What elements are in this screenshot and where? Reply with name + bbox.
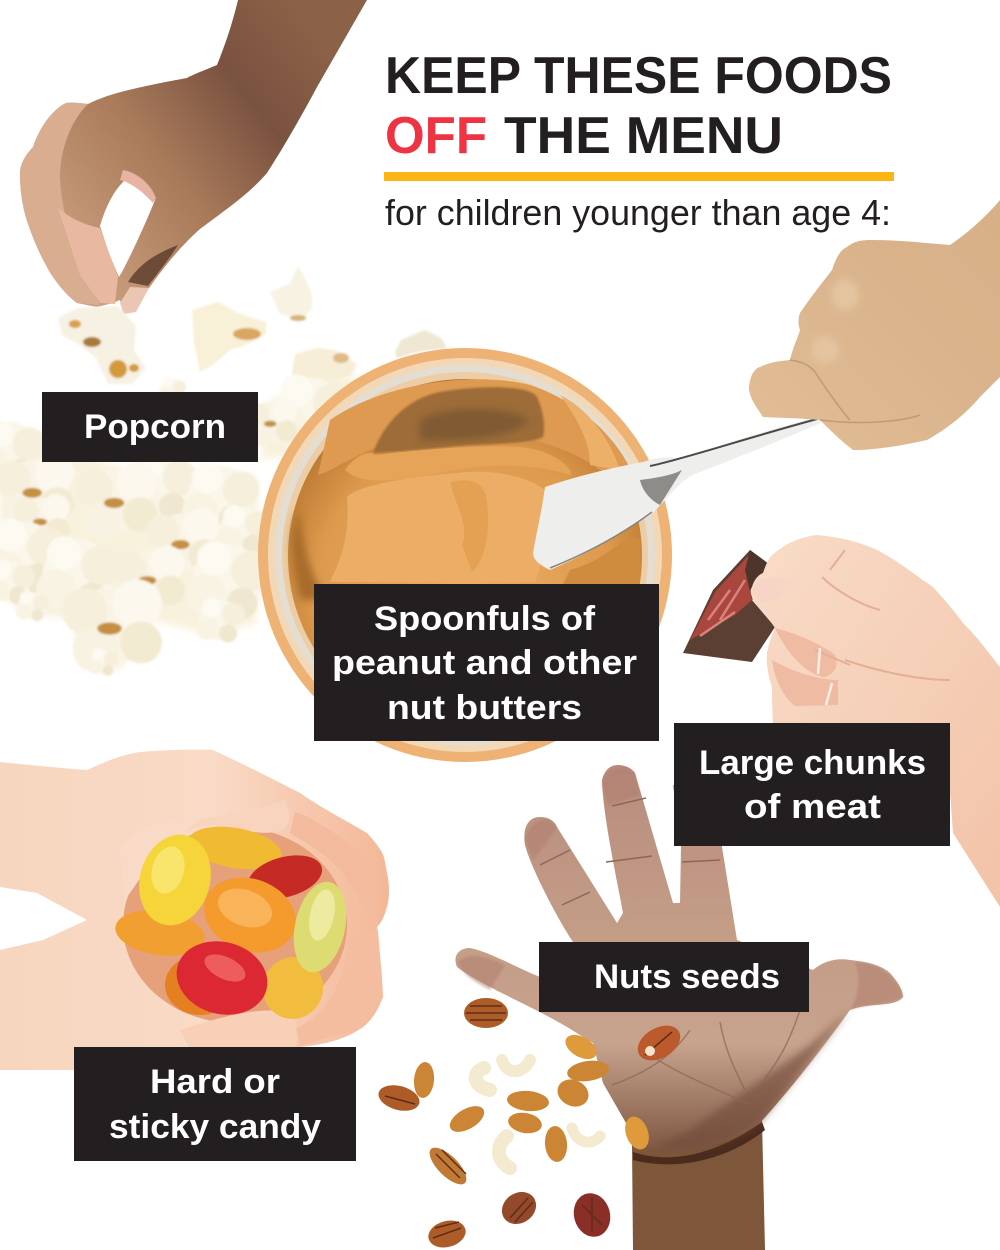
label: popcorn <box>42 392 258 462</box>
icon: hand picking popcorn <box>20 0 367 314</box>
label: nuts seeds: Nuts seeds <box>594 958 780 996</box>
label: popcorn: Popcorn <box>84 408 226 446</box>
icon: popcorn kernel under fingers <box>58 306 146 384</box>
label: nut butters: peanut and other <box>332 644 637 682</box>
subtitle: for children younger than age 4: <box>385 192 891 233</box>
title: THE MENU <box>504 107 783 165</box>
nuts <box>376 998 686 1250</box>
label: candy <box>74 1047 356 1161</box>
title underline <box>384 172 894 181</box>
popcorn pile <box>0 266 447 676</box>
title: OFF <box>385 107 487 165</box>
label: candy: sticky candy <box>109 1108 321 1146</box>
label: meat: of meat <box>744 788 881 826</box>
icon: hand holding meat <box>751 535 1000 907</box>
label: meat: Large chunks <box>699 744 926 782</box>
label: nuts seeds <box>539 942 809 1012</box>
label: nut butters: Spoonfuls of <box>374 600 596 638</box>
title: KEEP THESE FOODS <box>385 47 892 105</box>
icon: open hand with nuts <box>455 765 903 1250</box>
label: nut butters <box>314 584 659 741</box>
icon: cupped hands with candy <box>0 750 389 1070</box>
candy pieces <box>112 820 354 1027</box>
peanut butter jar <box>258 348 672 762</box>
title <box>385 47 892 165</box>
label: nut butters: nut butters <box>387 689 582 727</box>
icon: meat chunk <box>683 550 777 662</box>
icon: spreader knife <box>533 417 821 570</box>
icon: hand holding knife <box>749 200 1000 450</box>
label: candy: Hard or <box>150 1063 280 1101</box>
label: meat <box>674 723 950 846</box>
